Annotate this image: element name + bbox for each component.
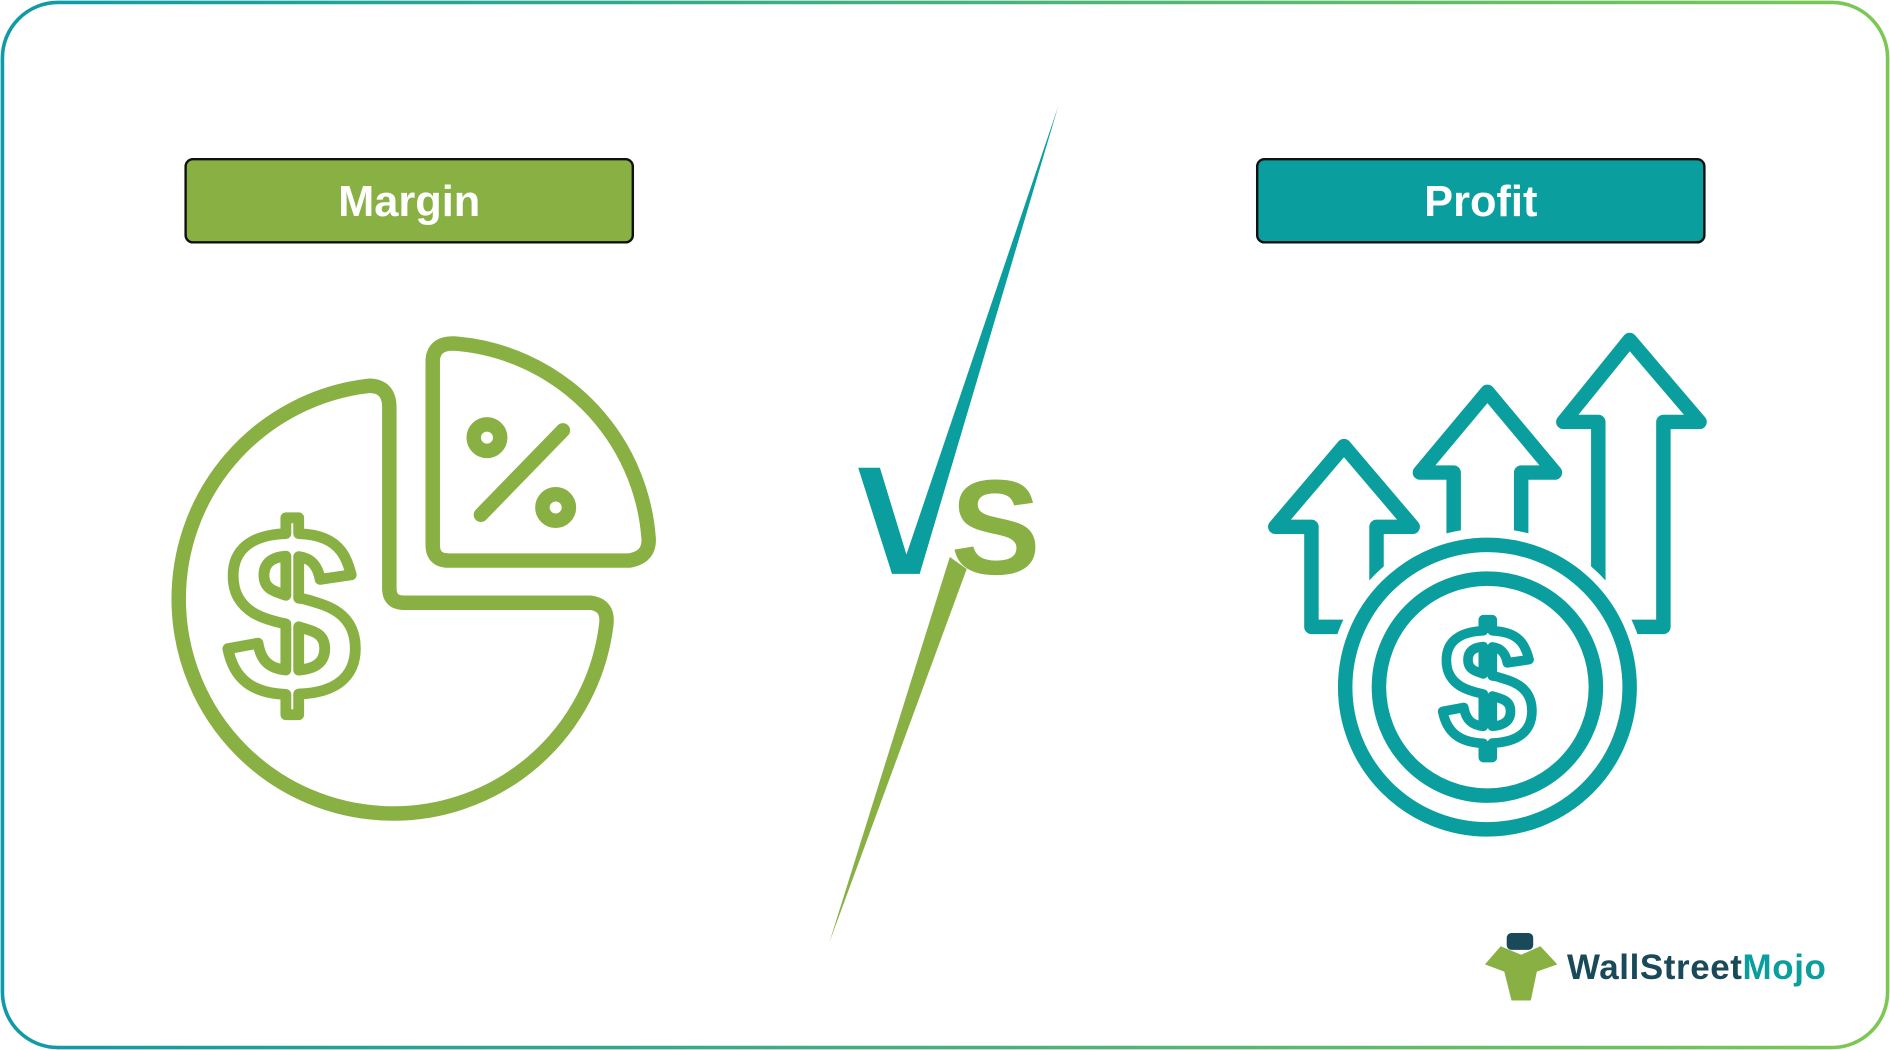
heading: Margin: Margin [338,178,480,226]
vs mark: S [951,452,1041,603]
icon: coin with rising arrows [1275,340,1700,846]
logo: WallStreetMojo [1485,933,1826,1001]
icon: pie chart with dollar and percent [179,344,649,813]
icon: pie chart with dollar and percent: $ [225,480,359,749]
vs mark [829,106,1058,943]
icon: coin with rising arrows: $ [1440,592,1534,781]
logo: WallStreetMojo: WallStreetMojo [1567,948,1826,987]
heading: Profit: Profit [1424,178,1537,226]
heading: Profit [1257,159,1704,242]
heading: Margin [186,159,633,242]
